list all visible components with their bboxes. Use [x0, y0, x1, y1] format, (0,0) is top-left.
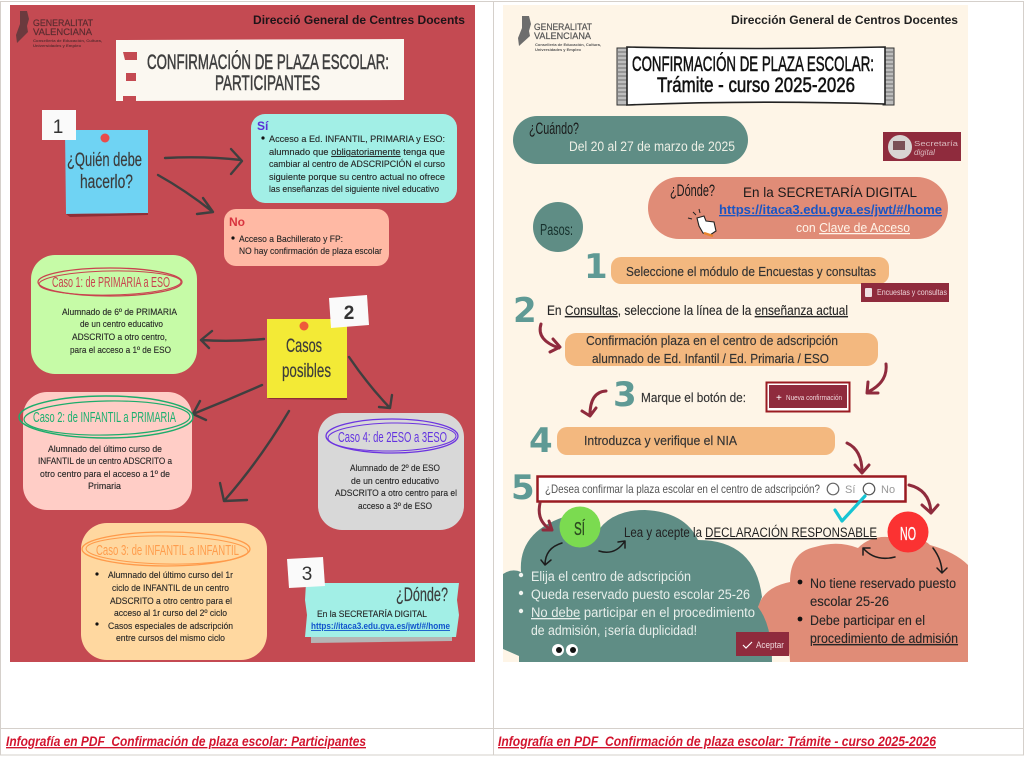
panel: caso 3: ADSCRITO a otro centro para el — [110, 596, 232, 607]
logo: Secretaría digital: Secretaría — [914, 139, 959, 148]
sticky note: Casos posibles: posibles — [282, 361, 331, 382]
pill: ¿Cuándo? — [513, 116, 748, 164]
step 4 — [529, 421, 835, 461]
panel: caso 1: de un centro educativo — [80, 319, 163, 330]
panel: Sí: siguiente porque su centro actual no ofrece — [269, 172, 445, 183]
text: Sí list: No debe participar en el procedimiento — [531, 605, 755, 620]
step 4: 4 — [529, 421, 553, 461]
panel: ¿Dónde? participantes — [305, 583, 459, 643]
button: Aceptar: Aceptar — [756, 640, 784, 650]
badge: No — [888, 512, 928, 552]
badge: No: NO — [900, 524, 916, 544]
arrow to Sí — [165, 149, 242, 174]
panel: caso 4: Alumnado de 2º de ESO — [350, 463, 440, 474]
sticky note: ¿Quién debe hacerlo?: hacerlo? — [80, 172, 133, 193]
circle: Pasos: Pasos: — [540, 222, 573, 239]
panel: caso 4: de un centro educativo — [351, 476, 439, 487]
step 5 question box: Sí — [845, 484, 855, 496]
pill: ¿Dónde?: ¿Dónde? — [670, 181, 715, 200]
arrow to step 4 — [582, 391, 606, 416]
logo: Secretaría digital — [883, 132, 961, 161]
title: participantes — [116, 39, 404, 101]
step 5 question box — [511, 468, 906, 508]
step 5 question box: ¿Desea confirmar la plaza escolar en el centro de adscripción? — [545, 482, 820, 496]
panel: caso 2: otro centro para el acceso a 1º de — [40, 469, 170, 480]
step 5 question box: 5 — [511, 468, 535, 508]
text: No list: No tiene reservado puesto — [810, 576, 956, 591]
step 2: 2 — [513, 291, 537, 331]
number tag 3 — [287, 557, 325, 588]
panel: ¿Dónde? participantes: ¿Dónde? — [396, 585, 448, 606]
panel: caso 2: Caso 2: de INFANTIL a PRIMARIA — [33, 409, 176, 426]
logo: Generalitat Valenciana: Conselleria de Educación, Cultura, — [535, 42, 601, 47]
panel: ¿Dónde? participantes: https://itaca3.edu.gva.es/jwt/#/home — [311, 621, 450, 631]
panel: caso 1: Alumnado de 6º de PRIMARIA — [62, 307, 178, 318]
panel: participantes infographic — [10, 5, 475, 662]
pill: ¿Dónde?: https://itaca3.edu.gva.es/jwt/#/home — [719, 202, 942, 217]
panel: caso 2 — [19, 392, 193, 510]
title: trámite scroll banner — [617, 47, 894, 105]
number tag 1 — [42, 110, 76, 140]
arrows: No branches — [863, 548, 947, 573]
panel: No: No — [229, 215, 245, 229]
step 2: Confirmación plaza en el centro de adscripción — [586, 333, 838, 348]
logo: Generalitat Valenciana — [518, 16, 601, 52]
title: participantes: CONFIRMACIÓN DE PLAZA ESCOLAR: — [147, 51, 389, 74]
caption link: participantes: Infografía en PDF_Confirmación de plaza escolar: Participantes — [6, 734, 366, 749]
arrow to No — [158, 175, 213, 214]
panel: Sí — [251, 114, 457, 203]
pill: ¿Dónde?: con Clave de Acceso — [796, 221, 910, 235]
step 5 question box: No — [881, 484, 895, 496]
panel: caso 2: INFANTIL de un centro ADSCRITO a — [38, 456, 173, 467]
title: trámite scroll banner: Trámite - curso 2025-2026 — [657, 74, 855, 97]
logo: Generalitat Valenciana: VALENCIANA — [33, 27, 92, 37]
cloud: No — [758, 537, 968, 662]
panel: No: Acceso a Bachillerato y FP: — [239, 234, 343, 245]
logo: Generalitat Valenciana: Universidades y Empleo — [33, 43, 82, 48]
logo: Generalitat Valenciana: Conselleria de Educación, Cultura, — [33, 38, 102, 43]
panel: caso 4 — [318, 413, 464, 530]
text: Sí list: Queda reservado puesto escolar 25-26 — [531, 587, 750, 602]
text: Sí list — [519, 569, 755, 638]
panel: Sí: Sí — [257, 119, 269, 133]
button: Encuestas y consultas: Encuestas y consultas — [877, 288, 947, 297]
sticky note: ¿Quién debe hacerlo?: ¿Quién debe — [67, 150, 142, 171]
title: trámite scroll banner: CONFIRMACIÓN DE PLAZA ESCOLAR: — [632, 53, 874, 76]
step 1 — [584, 247, 949, 302]
arrow to No — [909, 485, 938, 513]
title: participantes: PARTICIPANTES — [215, 72, 320, 95]
circle: Pasos — [533, 202, 583, 252]
caption link: trámite: Infografía en PDF_Confirmación de plaza escolar: Trámite - curso 2025-2026 — [498, 734, 936, 749]
panel: No — [224, 209, 389, 266]
text: No list: Debe participar en el — [810, 613, 925, 628]
logo: Generalitat Valenciana: GENERALITAT — [33, 18, 93, 28]
pill: ¿Dónde?: En la SECRETARÍA DIGITAL — [743, 184, 917, 200]
panel: Sí: las enseñanzas del siguiente nivel educativo — [269, 184, 439, 195]
step 4: Introduzca y verifique el NIA — [584, 433, 737, 448]
panel: caso 1: para el acceso a 1º de ESO — [70, 345, 171, 356]
logo: Secretaría digital: digital — [914, 148, 935, 157]
pill: ¿Dónde? — [648, 177, 948, 239]
panel: caso 3: Alumnado del último curso del 1r — [108, 570, 233, 581]
badge: Sí: SÍ — [574, 519, 585, 539]
step 2 — [513, 291, 878, 366]
step 3: 3 — [613, 375, 637, 415]
logo: Generalitat Valenciana: VALENCIANA — [534, 31, 591, 41]
panel: caso 3: entre cursos del mismo ciclo — [116, 633, 225, 644]
number tag 2 — [329, 295, 369, 328]
step 2: En Consultas, seleccione la línea de la enseñanza actual — [547, 303, 848, 318]
step 1: 1 — [584, 247, 608, 287]
arrow — [540, 324, 560, 352]
logo: Generalitat Valenciana: GENERALITAT — [534, 22, 592, 32]
pill: ¿Cuándo?: Del 20 al 27 de marzo de 2025 — [569, 139, 735, 154]
text: Sí list: Elija el centro de adscripción — [531, 569, 691, 584]
text: declaración responsable: Lea y acepte la DECLARACIÓN RESPONSABLE — [624, 525, 877, 540]
button: Nueva confirmación: + — [776, 393, 782, 404]
panel: caso 4: Caso 4: de 2ESO a 3ESO — [338, 429, 447, 446]
button: Nueva confirmación: Nueva confirmación — [786, 395, 842, 402]
sticky note: ¿Quién debe hacerlo? — [65, 130, 148, 217]
panel: Sí: cambiar al centro de ADSCRIPCIÓN el curso — [269, 159, 445, 170]
icon: teal check — [835, 496, 865, 521]
badge: Sí — [560, 506, 600, 548]
panel: caso 1: Caso 1: de PRIMARIA a ESO — [52, 274, 170, 291]
panel: trámite infographic — [503, 5, 968, 662]
panel: Sí: Acceso a Ed. INFANTIL, PRIMARIA y ESO: — [269, 134, 445, 145]
arrow to Sí — [539, 503, 552, 530]
panel: caso 3: ciclo de INFANTIL de un centro — [112, 583, 229, 594]
logo: Generalitat Valenciana: Universidades y Empleo — [535, 47, 582, 52]
step 2: alumnado de Ed. Infantil / Ed. Primaria / ESO — [592, 351, 829, 366]
arrow to caso 1 — [201, 331, 264, 348]
arrow to caso 2 — [193, 385, 262, 420]
text: No list: procedimiento de admisión — [810, 631, 958, 646]
number tag 1: 1 — [53, 117, 63, 138]
panel: caso 4: ADSCRITO a otro centro para el — [335, 488, 457, 499]
panel: caso 3: Casos especiales de adscripción — [108, 621, 233, 632]
arrows: Sí branches — [541, 541, 625, 565]
button: Encuestas y consultas — [861, 283, 949, 302]
logo: Generalitat Valenciana — [16, 11, 102, 48]
panel: ¿Dónde? participantes: En la SECRETARÍA DIGITAL — [317, 609, 427, 620]
cloud: Sí — [503, 510, 772, 662]
icon: pointing hand — [688, 209, 716, 236]
panel: caso 3: Caso 3: de INFANTIL a INFANTIL — [96, 542, 239, 559]
text: No list: escolar 25-26 — [810, 594, 889, 609]
panel: caso 3: acceso al 1r curso del 2º ciclo — [114, 608, 227, 619]
panel: caso 2: Alumnado del último curso de — [48, 444, 162, 455]
arrow to caso 4 — [349, 357, 392, 408]
text: Sí list: de admisión, ¡sería duplicidad! — [531, 623, 697, 638]
button: Aceptar — [736, 632, 789, 656]
icon: eyes — [552, 644, 578, 656]
heading: Direcció General: Direcció General de Centres Docents — [253, 13, 465, 27]
step 1: Seleccione el módulo de Encuestas y consultas — [626, 264, 876, 279]
pill: ¿Cuándo?: ¿Cuándo? — [529, 119, 579, 138]
heading: Dirección General: Dirección General de Centros Docentes — [731, 13, 958, 27]
arrow to step 5 — [847, 443, 869, 473]
sticky note: Casos posibles — [267, 319, 347, 400]
step 3 — [613, 375, 850, 415]
panel: caso 2: Primaria — [88, 481, 122, 492]
panel: No: NO hay confirmación de plaza escolar — [239, 246, 382, 257]
arrow to caso 3 — [220, 411, 289, 501]
panel: caso 1: ADSCRITO a otro centro, — [72, 332, 167, 343]
panel: caso 4: acceso a 3º de ESO — [358, 501, 432, 512]
sticky note: Casos posibles: Casos — [286, 336, 322, 357]
arrow to button — [867, 364, 886, 393]
number tag 2: 2 — [344, 303, 354, 324]
panel: caso 3 — [81, 523, 267, 660]
button: Nueva confirmación — [766, 382, 850, 412]
number tag 3: 3 — [302, 564, 312, 585]
step 3: Marque el botón de: — [641, 390, 746, 405]
panel: caso 1 — [31, 255, 197, 374]
text: No list — [798, 576, 958, 646]
panel: Sí: alumnado que obligatoriamente tenga que — [269, 147, 445, 158]
